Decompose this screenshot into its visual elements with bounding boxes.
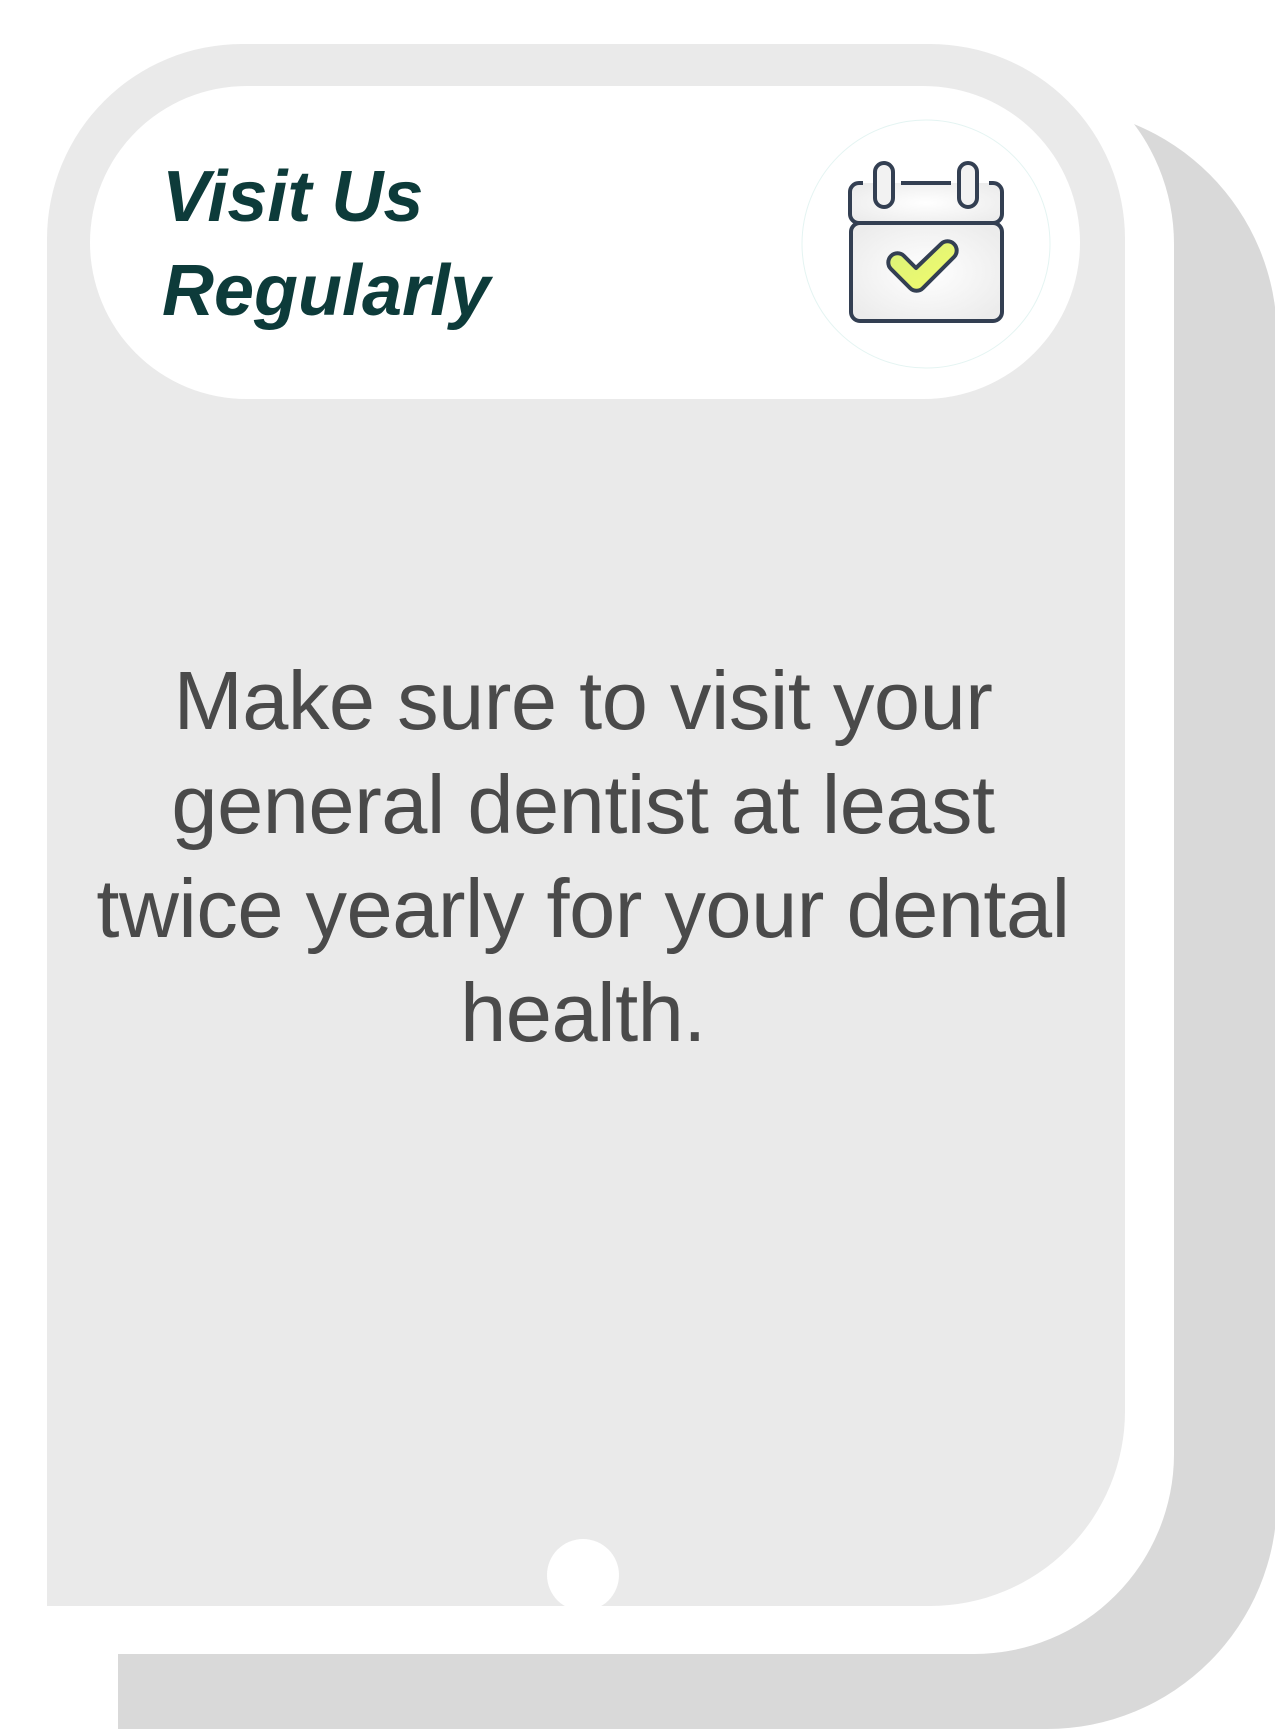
- header pill: [90, 86, 1080, 399]
- body text: health.: [460, 966, 706, 1059]
- body text: Make sure to visit your: [174, 654, 992, 747]
- title: Visit Us: [162, 157, 423, 237]
- icon: calendar with check: [802, 120, 1050, 368]
- main gray card: [47, 44, 1125, 1606]
- bottom button: [547, 1539, 619, 1611]
- body text: general dentist at least: [171, 758, 995, 851]
- body text: twice yearly for your dental: [96, 862, 1070, 955]
- title: Regularly: [162, 251, 490, 331]
- body text: [96, 654, 1070, 1059]
- title: [162, 157, 494, 331]
